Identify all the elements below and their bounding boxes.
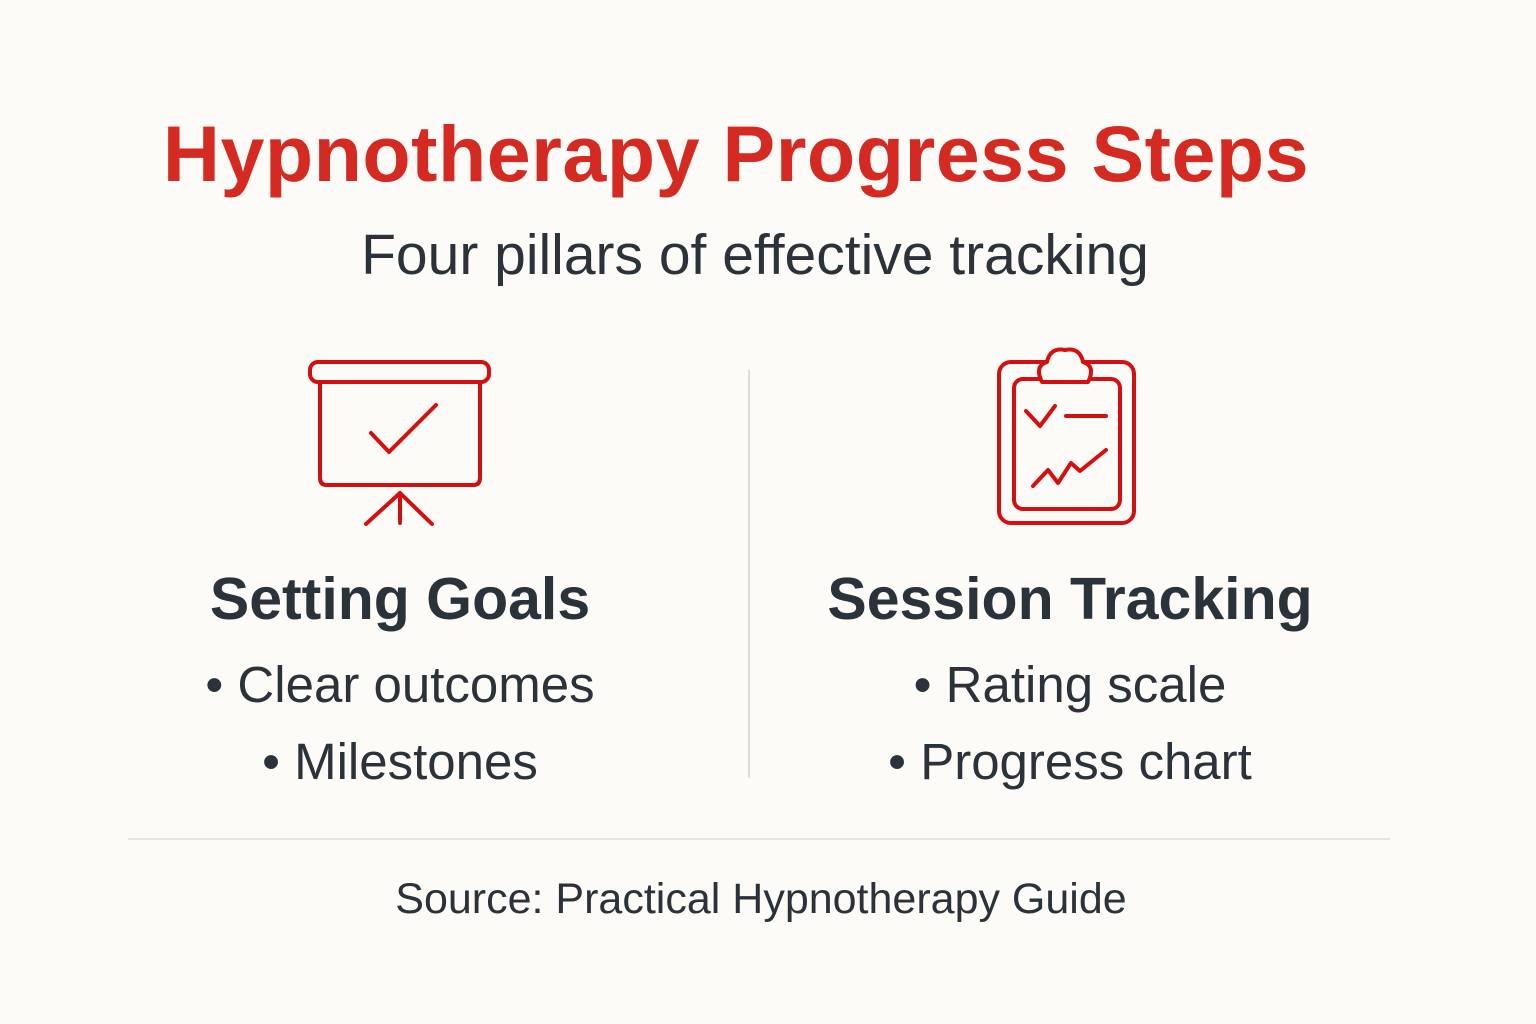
icon: presentation board bbox=[308, 360, 491, 526]
bullet list: • Rating scale bbox=[914, 656, 1226, 713]
heading: Session Tracking bbox=[827, 566, 1313, 632]
icon: clipboard bbox=[997, 348, 1136, 525]
subtitle: Four pillars of effective tracking bbox=[361, 223, 1149, 287]
panel: setting goals bbox=[205, 566, 595, 790]
bullet list bbox=[888, 656, 1252, 790]
bullet list bbox=[205, 656, 595, 790]
panel: session tracking bbox=[827, 566, 1313, 790]
source: Source: Practical Hypnotherapy Guide bbox=[395, 875, 1127, 923]
bullet list: • Milestones bbox=[262, 733, 538, 790]
bullet list: • Clear outcomes bbox=[205, 656, 595, 713]
bullet list: • Progress chart bbox=[888, 733, 1252, 790]
title: Hypnotherapy Progress Steps bbox=[163, 109, 1309, 198]
divider bbox=[748, 370, 750, 778]
heading: Setting Goals bbox=[210, 566, 590, 632]
